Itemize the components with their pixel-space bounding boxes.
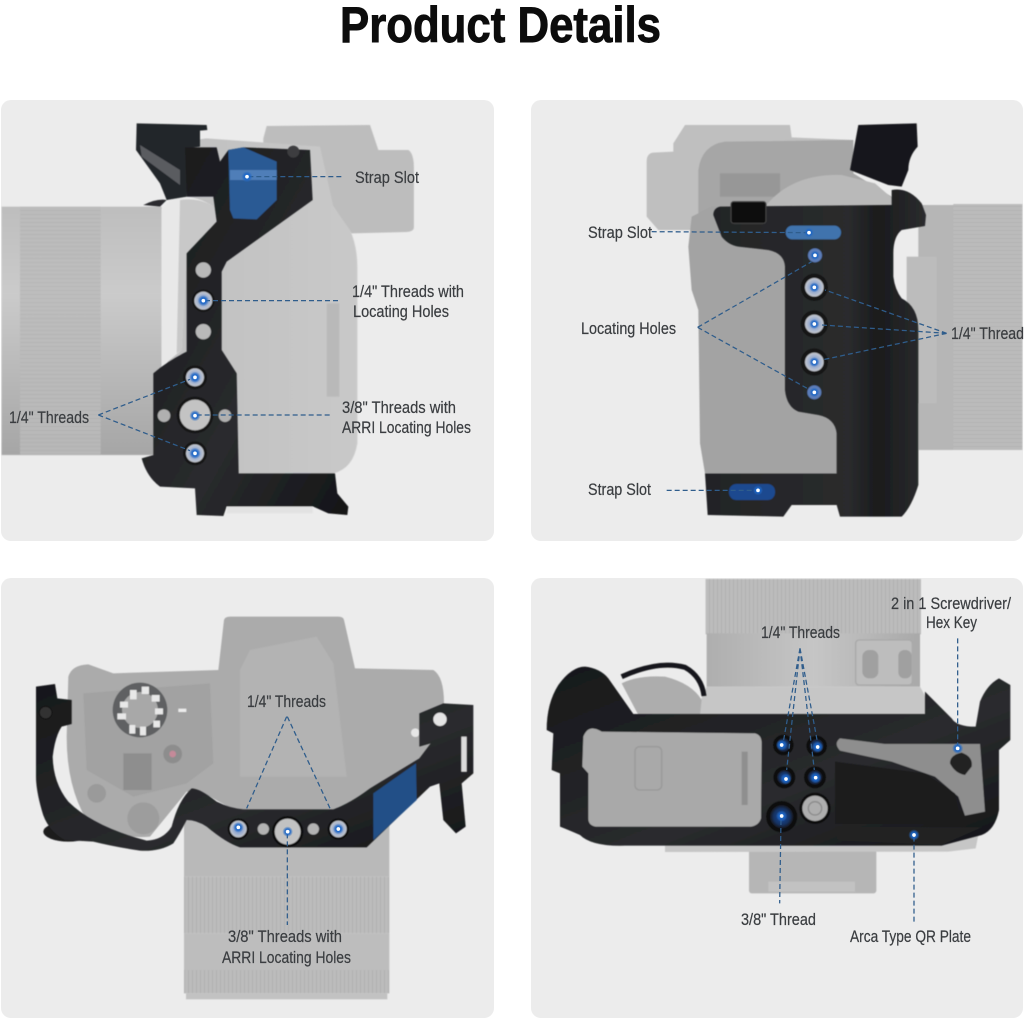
labels, bottom view: 2 in 1 Screwdriver/ [891, 595, 1011, 613]
grip cage [705, 123, 926, 517]
camera and lens, grip side [647, 125, 1022, 473]
camera and lens, top view [67, 617, 444, 999]
camera and lens, bottom view [622, 579, 978, 893]
labels, left side: 1/4" Threads [9, 409, 89, 427]
labels, top view: ARRI Locating Holes [222, 949, 351, 967]
labels, left side: Locating Holes [353, 303, 449, 321]
labels, bottom view [741, 595, 1011, 946]
labels, bottom view: 1/4" Threads [761, 624, 840, 642]
labels, grip side: Strap Slot [588, 224, 652, 242]
labels, bottom view: 3/8" Thread [741, 911, 816, 929]
panel: side view, left [1, 100, 494, 541]
callout lines and markers, top view [233, 717, 344, 925]
labels, bottom view: Hex Key [926, 614, 978, 632]
labels, grip side: Strap Slot [588, 481, 651, 499]
panel: top view, left [1, 578, 494, 1018]
labels, left side: ARRI Locating Holes [342, 419, 471, 437]
callout lines and markers, left side [98, 171, 342, 459]
labels, left side: 3/8" Threads with [342, 399, 456, 417]
labels, grip side [581, 224, 1024, 499]
cage, top view [36, 684, 473, 851]
labels, top view: 1/4" Threads [247, 693, 326, 711]
labels, left side [9, 169, 471, 437]
labels, grip side: Locating Holes [581, 320, 676, 338]
panel: bottom view, right [531, 578, 1023, 1018]
labels, left side: Strap Slot [355, 169, 419, 187]
callout lines and markers, grip side [652, 228, 947, 495]
camera cage, left side [136, 123, 348, 516]
cage, bottom view [547, 665, 1010, 846]
labels, top view [222, 693, 351, 967]
labels, bottom view: Arca Type QR Plate [850, 928, 971, 946]
labels, top view: 3/8" Threads with [228, 928, 342, 946]
camera and lens, left side [2, 125, 414, 473]
callout lines and markers, bottom view [776, 638, 963, 923]
panel: grip view, right [531, 100, 1024, 541]
labels, left side: 1/4" Threads with [352, 283, 464, 301]
